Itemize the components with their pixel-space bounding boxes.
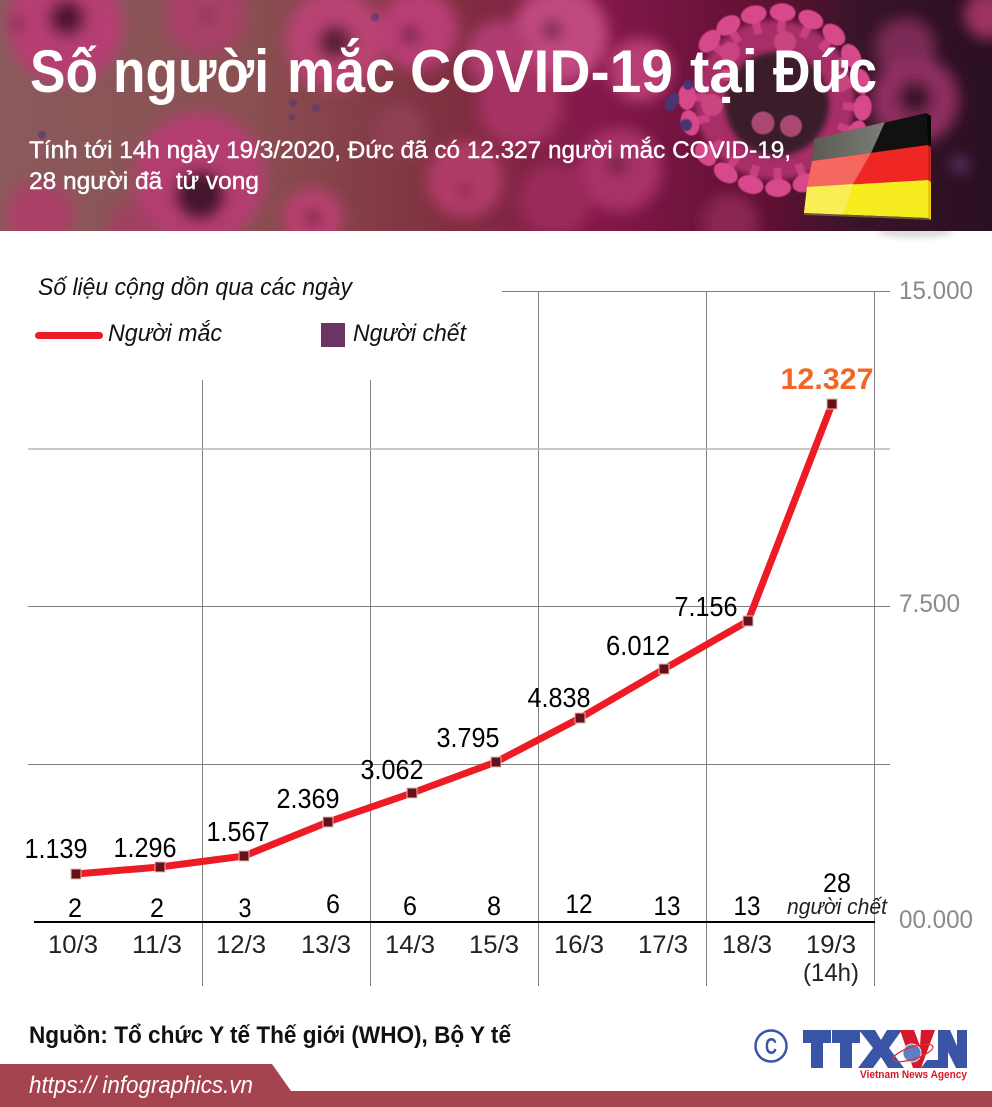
icon: German flag	[804, 113, 931, 220]
infected value labels: 4.838	[528, 682, 590, 713]
title: mắc	[287, 38, 395, 105]
infected value labels: 6.012	[606, 630, 670, 661]
title: tại	[690, 38, 758, 105]
x axis date labels: 11/3	[132, 931, 182, 959]
infected value labels: 1.139	[24, 833, 88, 864]
legend: deaths: Người chết	[353, 320, 467, 347]
x axis date labels: 16/3	[554, 931, 604, 959]
source: Nguồn: Tổ chức Y tế Thế giới (WHO), Bộ Y tế	[29, 1022, 512, 1049]
death value labels: 6	[326, 889, 340, 919]
title: Số	[30, 38, 98, 105]
title: COVID-19	[410, 38, 673, 105]
x axis date labels: 19/3	[806, 931, 856, 959]
chart caption: Số liệu cộng dồn qua các ngày	[38, 274, 354, 301]
title: Đức	[773, 38, 877, 105]
death value labels: 3	[238, 893, 252, 923]
death value labels	[68, 868, 851, 923]
death value labels: 13	[654, 891, 680, 921]
legend: infected	[35, 320, 222, 347]
title	[30, 38, 877, 105]
copyright icon	[756, 1030, 786, 1062]
infected value labels: 7.156	[674, 591, 738, 622]
death value labels: 2	[68, 893, 82, 923]
footer url: https:// infographics.vn	[29, 1072, 253, 1099]
footer bar	[0, 1064, 992, 1107]
y axis labels: 00.000	[899, 906, 973, 934]
x axis date labels: 10/3	[48, 931, 98, 959]
infected value labels: 2.369	[276, 783, 340, 814]
death value labels: 13	[734, 891, 760, 921]
death value labels: 28	[823, 868, 851, 898]
x axis date labels: 17/3	[638, 931, 688, 959]
deaths note: người chết	[787, 894, 888, 919]
death value labels: 12	[566, 889, 592, 919]
infected value labels: 1.296	[114, 832, 176, 863]
line series: infected	[71, 399, 837, 879]
subtitle	[29, 137, 791, 195]
death value labels: 8	[487, 891, 501, 921]
title: người	[113, 38, 269, 105]
infected value labels	[24, 591, 738, 864]
chart grid	[28, 291, 890, 986]
x axis date labels: 13/3	[301, 931, 351, 959]
header banner background	[0, 0, 992, 250]
subtitle: 28 người đã tử vong	[29, 168, 259, 195]
x axis date labels	[48, 931, 859, 987]
subtitle: Tính tới 14h ngày 19/3/2020, Đức đã có 12.327 người mắc COVID-19,	[29, 137, 791, 164]
x axis date labels: 18/3	[722, 931, 772, 959]
copyright icon: C	[765, 1033, 777, 1059]
x axis date labels: 12/3	[216, 931, 266, 959]
infected value labels: 3.062	[360, 754, 424, 785]
x axis date labels: 14/3	[385, 931, 435, 959]
legend: infected: Người mắc	[108, 320, 222, 347]
y axis labels: 7.500	[899, 590, 960, 618]
x axis date labels: (14h)	[803, 959, 859, 987]
y axis labels	[899, 277, 973, 934]
infected value labels: 1.567	[206, 816, 270, 847]
infected value labels: 3.795	[436, 722, 500, 753]
highlighted value 12.327: 12.327	[780, 363, 874, 396]
logo: TTXVN	[803, 1030, 968, 1081]
y axis labels: 15.000	[899, 277, 973, 305]
death value labels: 6	[403, 891, 417, 921]
virus particle	[662, 2, 873, 197]
x axis date labels: 15/3	[469, 931, 519, 959]
death value labels: 2	[150, 893, 164, 923]
logo: TTXVN: Vietnam News Agency	[860, 1069, 968, 1081]
